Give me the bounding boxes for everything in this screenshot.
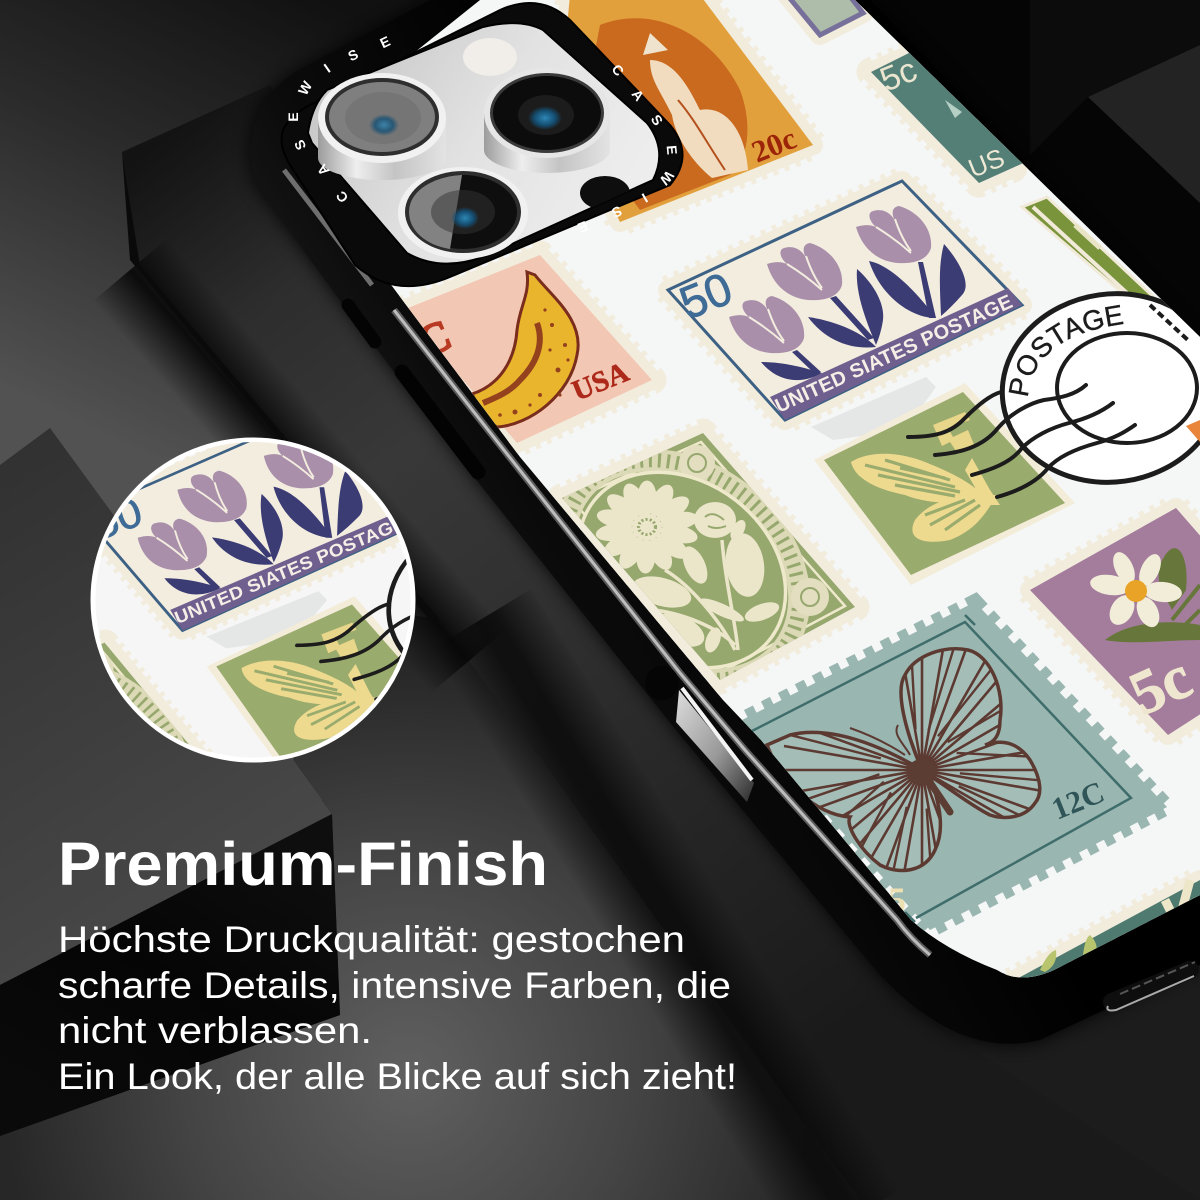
lidar xyxy=(580,176,630,210)
lens upper left xyxy=(318,73,446,180)
brand ring lettering: E xyxy=(576,218,590,236)
postmark xyxy=(906,291,1200,499)
label: 20c: 20c xyxy=(747,120,801,169)
description text: Höchste Druckqualität: gestochen xyxy=(58,919,685,960)
stamp: banana xyxy=(403,255,652,443)
description text xyxy=(58,919,737,1097)
label: partial 5: 5 xyxy=(888,880,906,920)
stems and leaves xyxy=(655,540,738,650)
bottom port xyxy=(1107,962,1195,1010)
brand ring lettering: W xyxy=(295,78,316,98)
brand ring lettering: S xyxy=(609,203,625,221)
label: 12c: 12C xyxy=(1047,774,1109,826)
brand ring lettering: E xyxy=(377,33,393,51)
stamp: teal 5c xyxy=(871,50,1030,184)
brand ring lettering: W xyxy=(656,168,677,189)
stamp: floral green xyxy=(521,415,855,725)
label: C: C xyxy=(410,310,458,367)
brand ring lettering: I xyxy=(639,190,651,206)
zoom detail circle xyxy=(90,438,416,762)
banana xyxy=(472,272,578,427)
large daisy xyxy=(594,480,700,574)
camera island xyxy=(282,3,682,286)
inset: floral stamp xyxy=(99,630,212,752)
flash xyxy=(463,38,517,76)
label: US: US xyxy=(964,142,1009,184)
brand ring lettering xyxy=(285,33,680,236)
inset: postmark lines xyxy=(292,502,615,700)
phone rim highlight xyxy=(284,170,930,955)
brand ring lettering: A xyxy=(314,161,332,179)
label: USA: USA xyxy=(568,356,633,407)
rose xyxy=(694,502,736,538)
phone case body xyxy=(250,0,1200,1044)
brand ring lettering: C xyxy=(609,61,627,79)
brand ring lettering: S xyxy=(648,112,666,128)
inset: grey shadow xyxy=(206,591,328,648)
description text: scharfe Details, intensive Farben, die xyxy=(58,965,731,1006)
stamp: teal butterfly 12c xyxy=(742,602,1167,930)
brand ring lettering: S xyxy=(345,46,361,64)
phone back printed with stamps xyxy=(391,0,1200,978)
brand ring lettering: A xyxy=(629,86,647,104)
stamp: orange cat 20c xyxy=(560,0,813,222)
inset label: 50: 50 xyxy=(87,489,148,549)
label: 50: 50 xyxy=(672,262,739,329)
clear window xyxy=(308,23,659,264)
inset: tulip stamp xyxy=(73,414,423,631)
silver side button xyxy=(645,666,754,802)
brand ring lettering: I xyxy=(321,60,333,76)
brand ring lettering: C xyxy=(333,188,351,206)
side button slot xyxy=(348,305,375,342)
lens lower xyxy=(398,167,528,259)
stamp: green butterfly xyxy=(814,383,1075,585)
brand ring lettering: E xyxy=(664,145,680,155)
gold butterfly xyxy=(851,454,1000,542)
grey shadow patch xyxy=(811,377,936,440)
brand ring lettering: S xyxy=(291,137,309,153)
stamp: purple daisy 5c xyxy=(1030,508,1200,735)
daisy flower xyxy=(1089,549,1183,631)
stamp: tulips 50 xyxy=(668,181,1022,420)
gold 5c glyph xyxy=(933,412,975,454)
stamp: green top right xyxy=(1020,195,1156,298)
description text: nicht verblassen. xyxy=(58,1010,372,1051)
label: 5c: 5c xyxy=(875,51,922,99)
brand ring lettering: E xyxy=(285,112,301,122)
brown butterfly xyxy=(764,647,1042,872)
inset: butterfly stamp xyxy=(207,596,402,757)
label: POSTAGE: POSTAGE xyxy=(1008,304,1124,396)
volume button slot xyxy=(402,372,478,472)
inset label: United States Postage: UNITED SIATES POSTAGE xyxy=(172,512,408,628)
description text: Ein Look, der alle Blicke auf sich zieht! xyxy=(58,1056,737,1097)
label: 5c: 5c xyxy=(1120,643,1200,729)
stamp: bottom teal xyxy=(1011,880,1200,1000)
heading: Premium-Finish xyxy=(58,830,548,898)
label: United States Postage: UNITED SIATES POSTAGE xyxy=(772,291,1016,418)
lens upper right xyxy=(484,68,610,173)
stamp: top grey-green xyxy=(783,0,863,35)
